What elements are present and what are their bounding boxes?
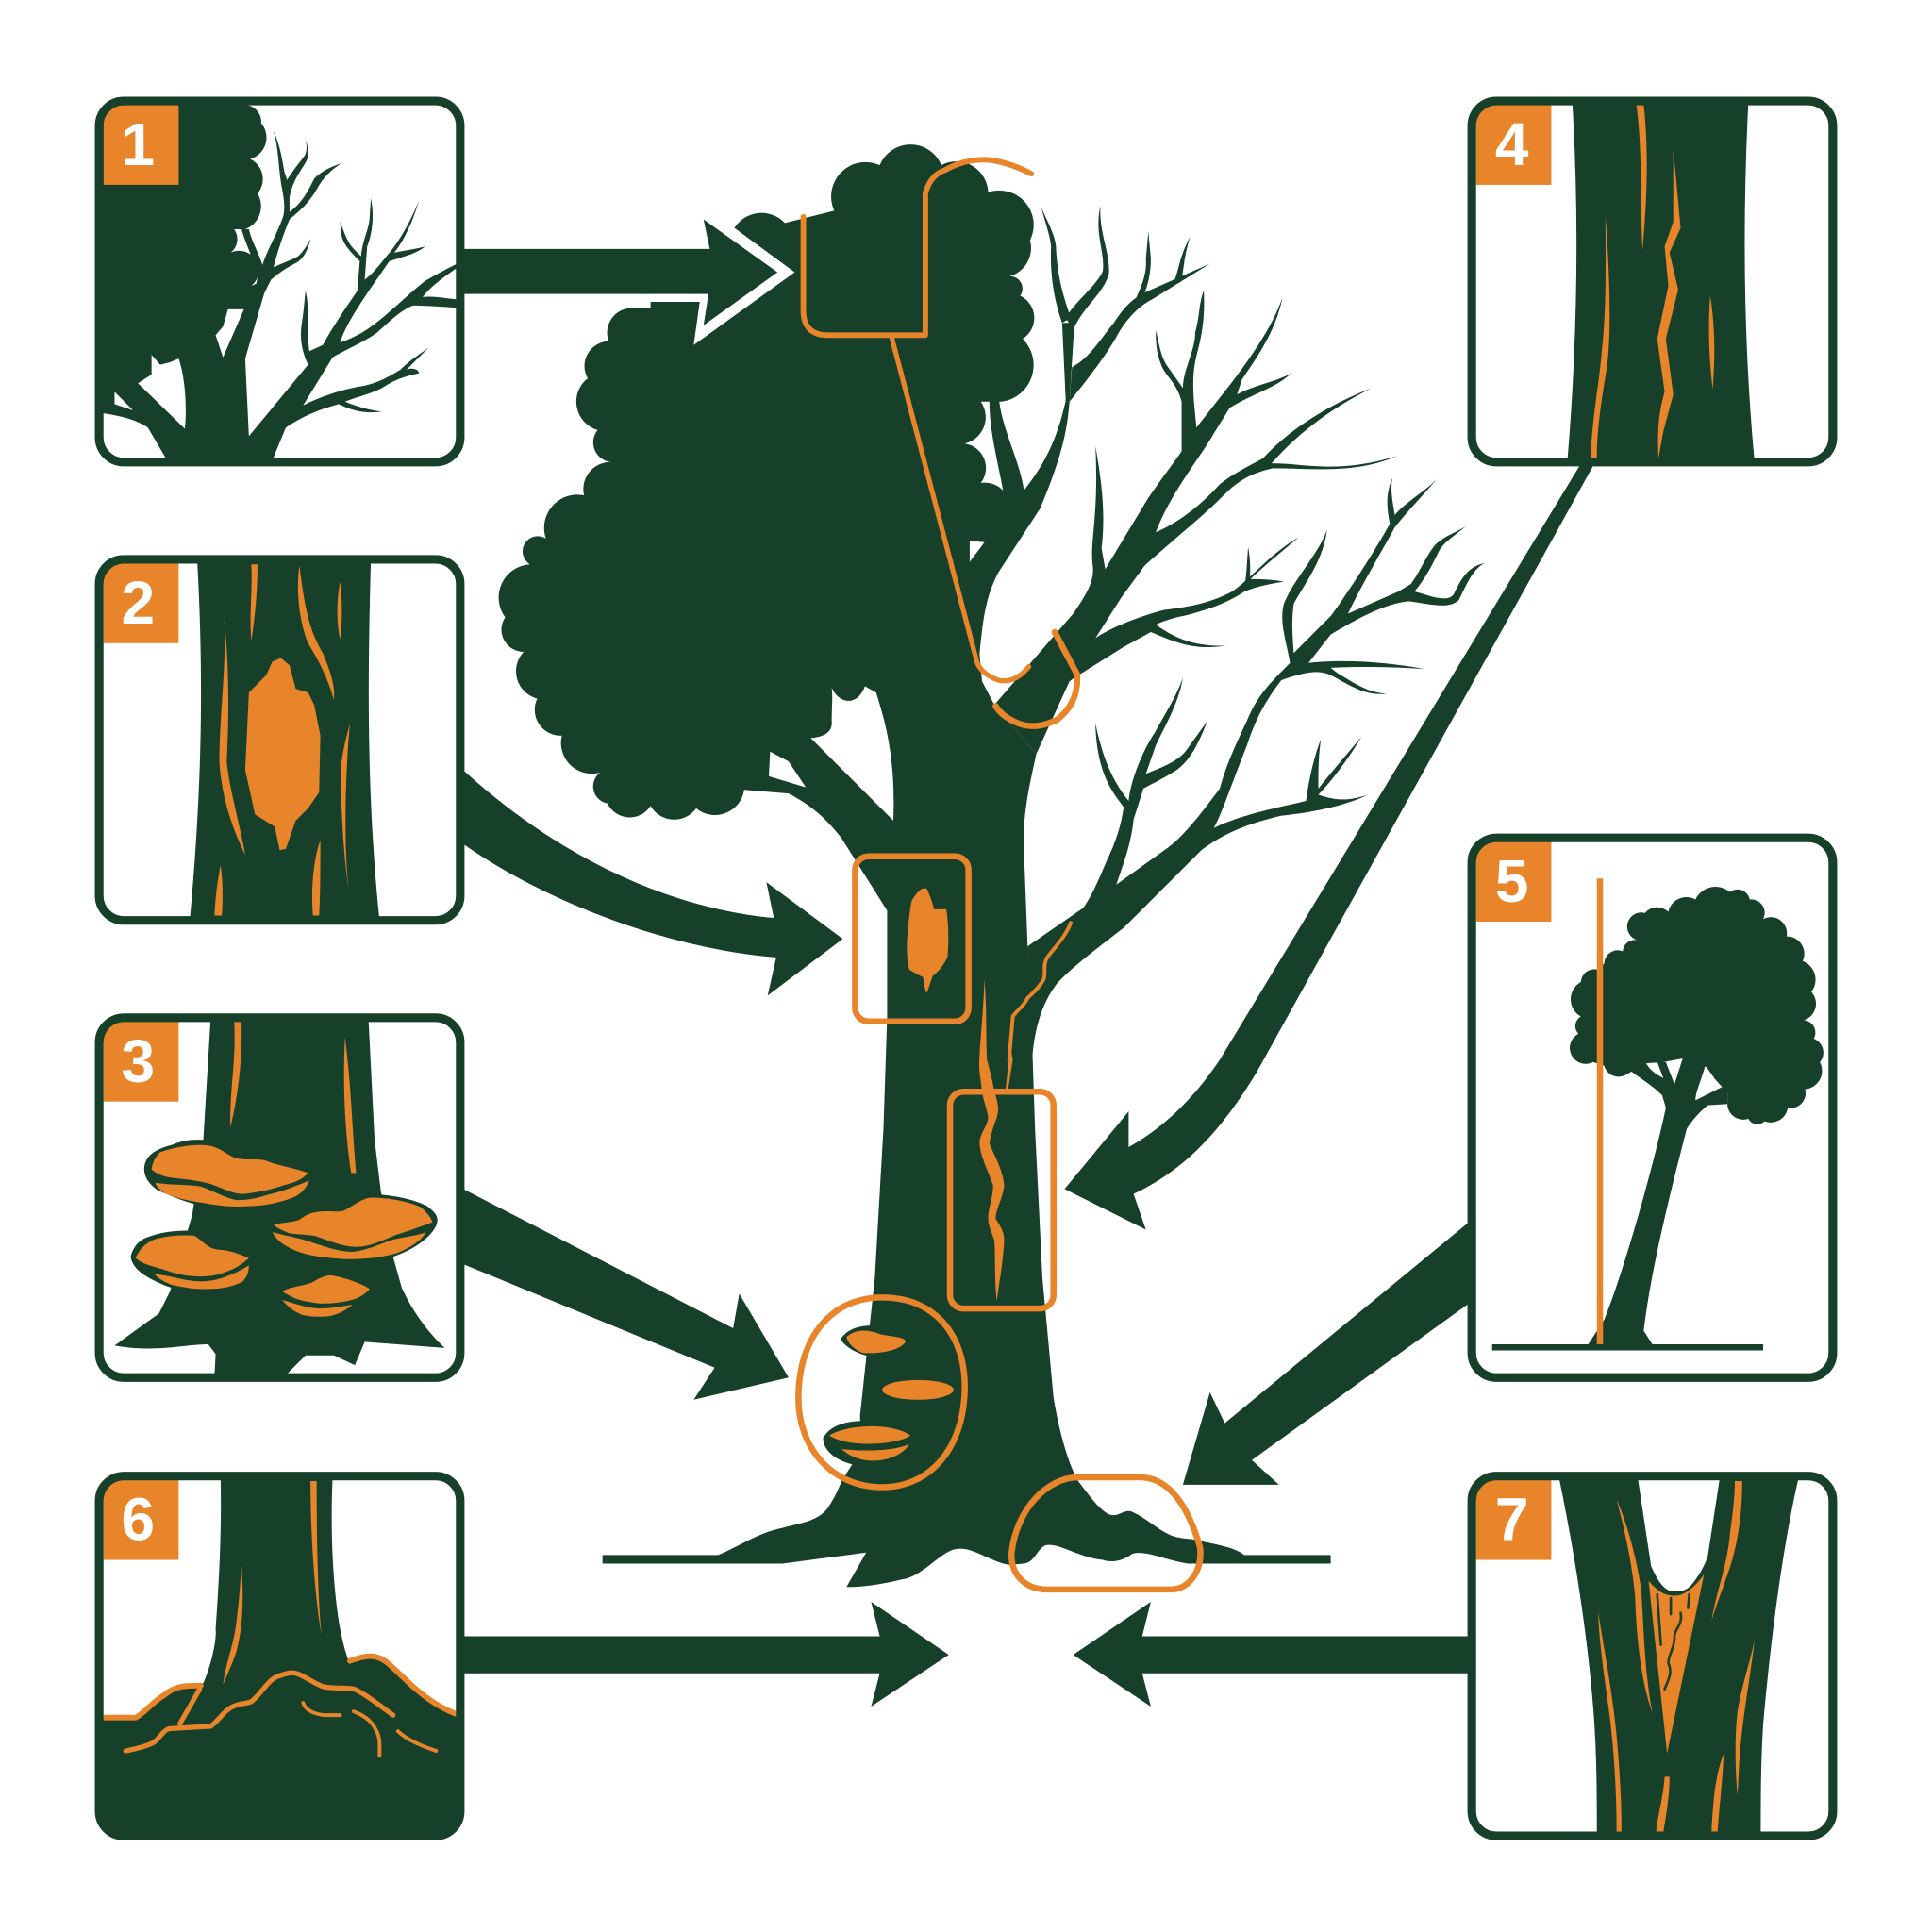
panel 3 artwork xyxy=(114,1018,445,1377)
main tree xyxy=(499,144,1485,1590)
panel 7 artwork xyxy=(1558,1476,1799,1836)
number badge 5 xyxy=(1476,841,1551,922)
number badge 2 xyxy=(104,563,178,643)
ring: roots xyxy=(1011,1477,1200,1590)
dead limb lower branch system xyxy=(1027,478,1485,1055)
number 7: 7 xyxy=(1495,1486,1528,1554)
number 5: 5 xyxy=(1495,847,1528,915)
ring: branch union xyxy=(995,632,1077,726)
panel frame xyxy=(1472,101,1833,462)
arrow 1 outline xyxy=(649,225,794,345)
main tree canopy xyxy=(499,144,1070,862)
number 3: 3 xyxy=(121,1027,155,1095)
ring: top of crown xyxy=(804,159,1031,335)
panel frame xyxy=(99,1018,460,1377)
arrow 7 xyxy=(1074,1602,1469,1707)
panel frame xyxy=(99,559,460,921)
number badge 6 xyxy=(104,1480,178,1560)
panel frame xyxy=(1472,838,1833,1377)
dead limb upper branch system xyxy=(994,291,1397,754)
ring: crack xyxy=(950,1091,1054,1308)
ring: blotch xyxy=(855,857,969,1022)
number 6: 6 xyxy=(121,1486,155,1554)
ring: fungi xyxy=(798,1297,965,1487)
twigs on limb tip xyxy=(1041,206,1250,587)
main tree trunk and roots xyxy=(603,705,1331,1587)
panel 1: crown dieback xyxy=(99,101,460,463)
number badge 7 xyxy=(1476,1480,1551,1560)
ring: crown leader line xyxy=(892,339,1029,681)
trunk cracks xyxy=(979,923,1071,1301)
panel 1 artwork xyxy=(100,101,459,463)
number 1: 1 xyxy=(121,110,155,178)
panel 4: trunk cracks xyxy=(1472,101,1833,462)
panel 7: included bark fork xyxy=(1472,1476,1833,1836)
panel 2 artwork xyxy=(190,559,379,921)
panel frame xyxy=(1472,1476,1833,1836)
number 2: 2 xyxy=(121,569,155,637)
panel frame xyxy=(99,1476,460,1836)
arrow 4 xyxy=(1064,466,1593,1230)
fungi on trunk xyxy=(823,1325,954,1466)
number badge 1 xyxy=(104,105,178,185)
panel 2: canker on trunk xyxy=(99,559,460,921)
panel 6: root heave xyxy=(99,1476,460,1836)
panel 4 artwork xyxy=(1567,101,1755,462)
canopy gaps xyxy=(769,541,985,821)
blotch on trunk xyxy=(907,889,948,993)
panel frame xyxy=(99,101,460,462)
panel 6 artwork xyxy=(100,1476,459,1836)
arrow 3 xyxy=(463,1189,789,1400)
number badge 4 xyxy=(1476,105,1551,185)
panel 3: bracket fungi xyxy=(99,1018,460,1377)
arrow 5 xyxy=(1183,1223,1469,1485)
arrow 6 xyxy=(463,1602,949,1707)
number 4: 4 xyxy=(1495,110,1529,178)
panel 5: leaning tree xyxy=(1472,838,1833,1377)
panel 5 artwork xyxy=(1492,878,1824,1351)
number badge 3 xyxy=(104,1022,178,1102)
arrow 2 xyxy=(463,770,842,995)
arrow 1 xyxy=(463,219,777,325)
